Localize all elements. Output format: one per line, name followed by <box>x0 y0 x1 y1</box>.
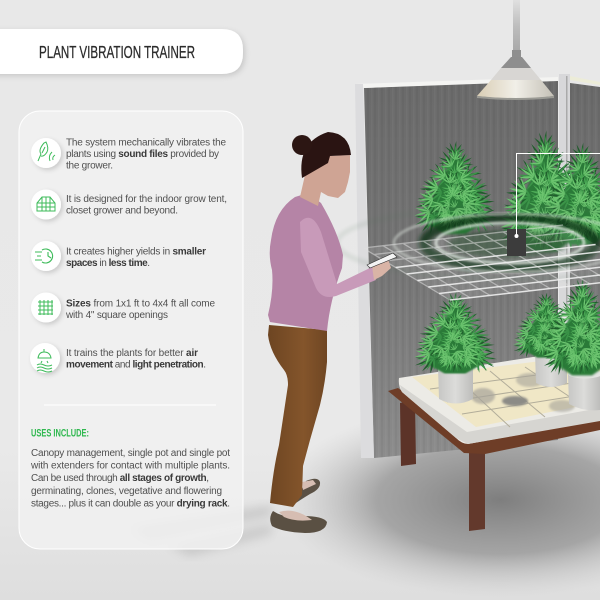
torso <box>268 193 343 331</box>
plants above the grid <box>408 130 600 258</box>
text: with 4" square openings <box>65 310 168 321</box>
arm <box>300 218 376 297</box>
hanging lamp <box>477 0 554 100</box>
feature 5 <box>30 343 206 373</box>
pot: left <box>438 362 473 404</box>
hand <box>372 259 391 280</box>
callout line <box>514 154 600 238</box>
pot: middle <box>535 348 567 387</box>
text: Sizes from 1x1 ft to 4x4 ft all come <box>66 298 215 310</box>
feature 2 <box>31 190 227 220</box>
icon: grid <box>31 292 61 322</box>
plant: right upper <box>535 142 600 250</box>
text: movement and light penetration. <box>66 360 206 370</box>
uses include text: Can be used through all stages of growth, <box>31 473 209 484</box>
plant pots <box>438 348 600 410</box>
plant: middle lower <box>508 292 585 361</box>
uses include text: germinating, clones, vegetative and flowering <box>31 486 222 497</box>
plant: left upper <box>408 141 503 239</box>
shadows on tray <box>471 373 575 412</box>
feature 4 <box>31 292 215 322</box>
text <box>66 194 227 216</box>
icon: lamp and air waves <box>30 343 60 373</box>
title text: PLANT VIBRATION TRAINER <box>39 42 195 62</box>
text <box>66 348 206 370</box>
uses include heading: USES INCLUDE: <box>31 428 89 440</box>
text: It creates higher yields in smaller <box>66 246 206 258</box>
text <box>66 246 206 269</box>
vibration device box <box>507 229 526 256</box>
vibration ripples <box>337 207 600 279</box>
phone <box>367 253 397 268</box>
text <box>65 298 215 321</box>
uses include text: with extenders for contact with multiple plants. <box>30 460 230 472</box>
front shoe <box>270 511 327 533</box>
white tray <box>399 350 600 444</box>
tray channels <box>430 362 600 427</box>
text: plants using sound files provided by <box>66 149 219 160</box>
icon: stopwatch speed <box>31 241 61 271</box>
back shoe <box>293 479 320 505</box>
text: It trains the plants for better air <box>66 348 198 359</box>
plant: right lower <box>537 278 600 381</box>
pot: right <box>568 370 600 410</box>
growing enclosure wall <box>355 74 600 458</box>
hair bun <box>292 135 312 155</box>
floor shadow <box>275 402 600 598</box>
back foot <box>302 480 316 490</box>
table leg front <box>469 450 485 531</box>
icon: leaf with sound waves <box>31 138 61 168</box>
neck and face <box>300 155 350 206</box>
title bar <box>0 29 243 74</box>
front foot <box>279 511 312 521</box>
text: closet grower and beyond. <box>66 206 178 216</box>
person: woman with phone <box>268 132 397 533</box>
wooden rim <box>388 388 600 454</box>
text: It is designed for the indoor grow tent, <box>66 194 227 205</box>
text: The system mechanically vibrates the <box>66 138 226 148</box>
wire trellis grid <box>363 225 600 300</box>
tray front wall <box>400 385 600 444</box>
table leg back <box>400 400 416 466</box>
uses include text <box>30 448 230 510</box>
uses include text: Canopy management, single pot and single pot <box>31 448 230 459</box>
glass info panel <box>19 111 243 549</box>
person's cast shadow <box>130 505 272 556</box>
trousers <box>268 325 327 507</box>
plant: middle upper <box>493 130 597 258</box>
plants below the grid <box>408 278 600 381</box>
hair <box>301 132 351 178</box>
cream tray floor <box>412 354 600 427</box>
wall frame <box>355 74 600 458</box>
grow table <box>388 350 600 531</box>
text: the grower. <box>66 160 113 172</box>
text: spaces in less time. <box>66 258 150 269</box>
plant: left lower <box>408 292 503 378</box>
feature 1 <box>31 138 226 172</box>
uses include text: stages... plus it can double as your drying rack. <box>31 498 230 510</box>
feature 3 <box>31 241 206 271</box>
text <box>66 138 226 172</box>
icon: greenhouse <box>31 190 61 220</box>
